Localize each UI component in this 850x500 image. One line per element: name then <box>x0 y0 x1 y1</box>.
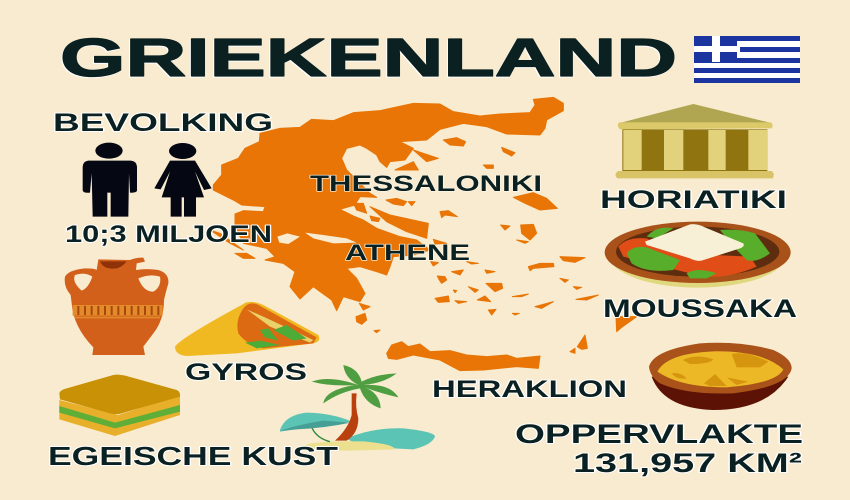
map of Greece <box>210 97 637 371</box>
gulfs <box>277 233 357 244</box>
label: area: OPPERVLAKTE <box>515 419 803 449</box>
label: Moussaka: MOUSSAKA <box>603 295 797 323</box>
icon: salad plate <box>605 222 791 288</box>
icon: palm island <box>280 365 435 451</box>
Crete <box>387 342 540 371</box>
icon: man and woman <box>83 143 212 217</box>
mainland <box>213 97 563 311</box>
icon: moussaka bowl <box>649 343 792 410</box>
icon: Greek flag <box>694 36 800 83</box>
icon: gyros wrap <box>175 302 319 356</box>
label: Athens: ATHENE <box>345 240 470 265</box>
heading: population: BEVOLKING <box>53 109 273 137</box>
label: gyros: GYROS <box>185 359 307 386</box>
icon: temple <box>616 104 774 178</box>
title: GRIEKENLAND <box>60 28 677 88</box>
Aegean islands <box>210 138 637 353</box>
label: Horiatiki: HORIATIKI <box>600 186 787 214</box>
icon: amphora <box>65 258 168 355</box>
icon: baklava <box>59 375 180 436</box>
text: population value: 10;3 MILJOEN <box>65 221 272 248</box>
label: Heraklion: HERAKLION <box>432 376 627 403</box>
label: Thessaloniki: THESSALONIKI <box>310 171 542 196</box>
Euboea <box>353 203 428 238</box>
text: area value: 131,957 KM² <box>573 448 802 478</box>
label: Aegean coast: EGEISCHE KUST <box>48 441 338 471</box>
